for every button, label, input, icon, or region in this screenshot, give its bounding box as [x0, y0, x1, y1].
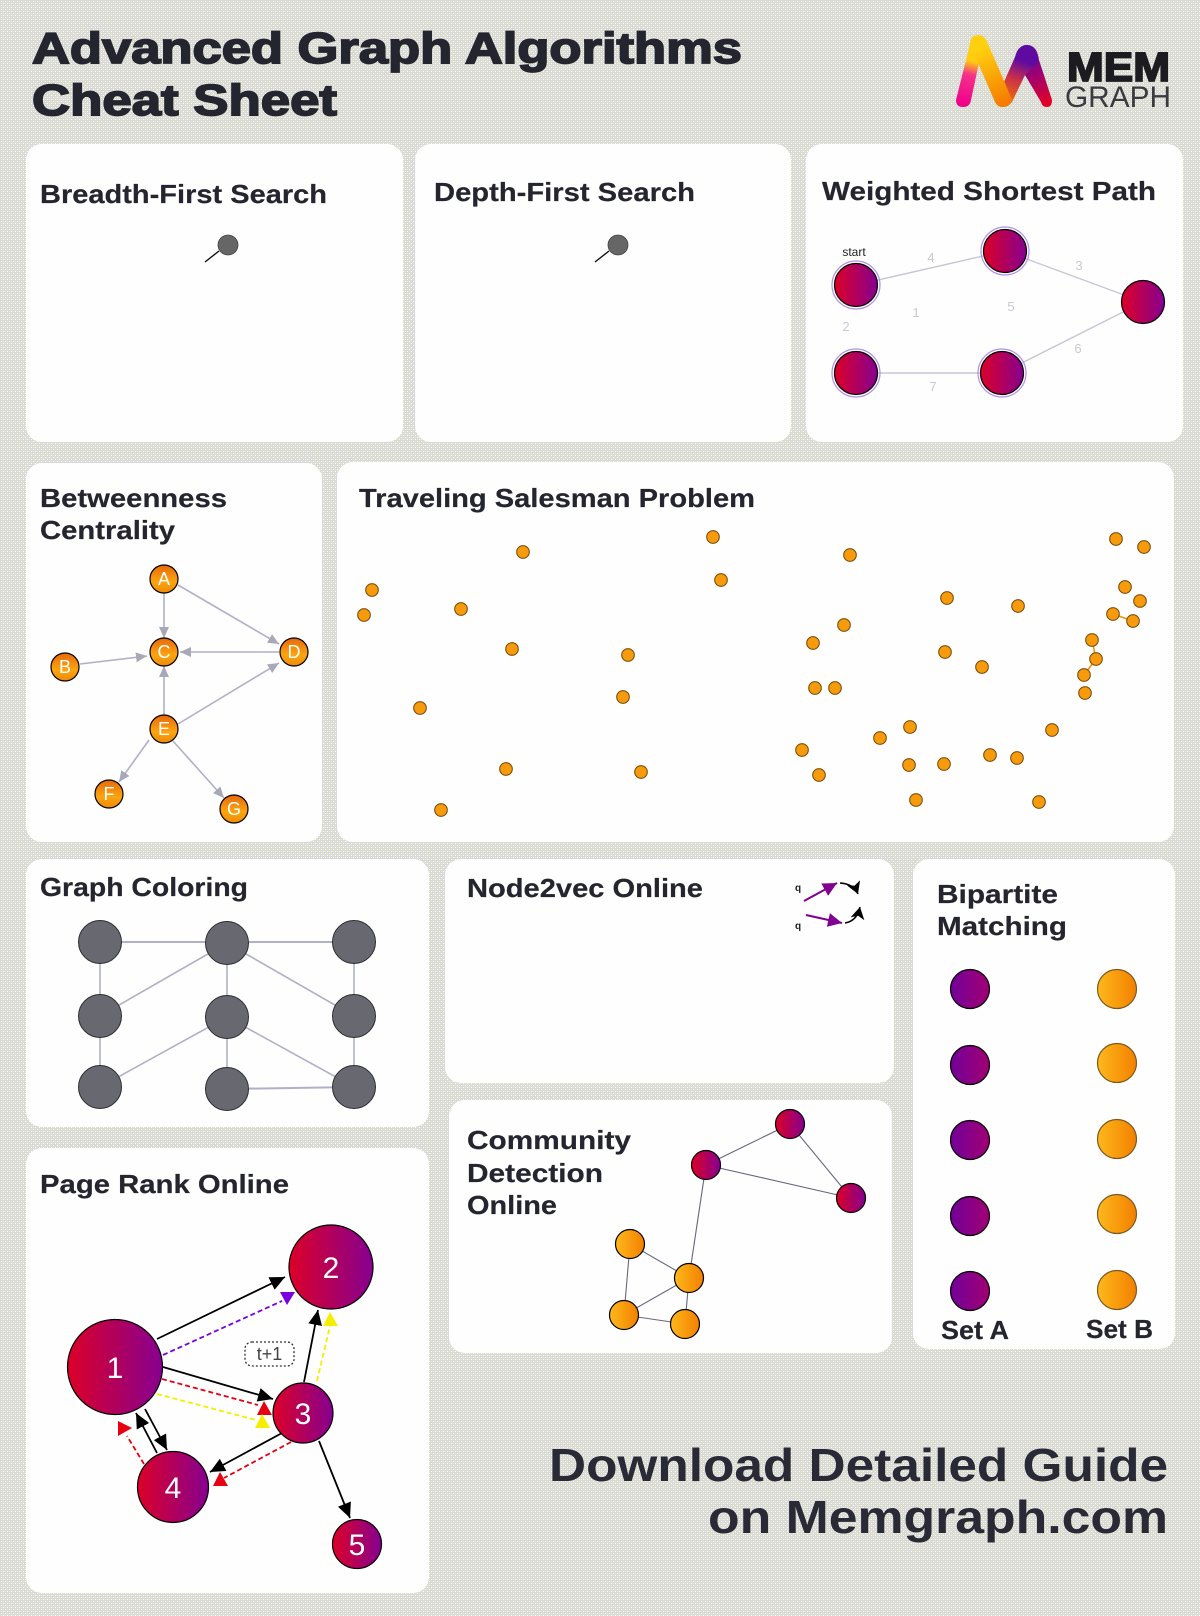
logo: Memgraph: GRAPH	[1065, 81, 1171, 114]
icon: p and q walk parameters: q	[795, 921, 801, 932]
directed graph: E	[158, 719, 170, 739]
panel: Bipartite Matching: Matching	[937, 911, 1067, 941]
directed graph: C	[158, 642, 170, 662]
set A nodes	[950, 970, 990, 1310]
panel: Bipartite Matching: Bipartite	[937, 879, 1058, 909]
weighted graph: 3	[1075, 258, 1083, 273]
panel: Depth-First Search: Depth-First Search	[434, 177, 695, 207]
title	[32, 24, 742, 125]
panel: Graph Coloring	[26, 859, 429, 1127]
panel: Weighted Shortest Path	[806, 144, 1183, 442]
directed graph	[51, 565, 308, 823]
panel: Traveling Salesman Problem	[337, 462, 1174, 842]
weighted graph	[832, 227, 1164, 397]
panel: Betweenness Centrality	[26, 463, 322, 842]
weighted graph: 1	[912, 305, 920, 320]
t+1 time step badge: t+1	[257, 1344, 282, 1364]
weighted graph: 7	[929, 379, 937, 394]
page rank graph: 5	[349, 1529, 365, 1562]
directed graph: B	[59, 657, 71, 677]
grid graph	[78, 920, 376, 1110]
panel: Community Detection Online: Community	[467, 1125, 632, 1155]
panel: Node2vec Online	[445, 859, 894, 1083]
start node with edge	[205, 235, 238, 262]
page rank graph: 4	[165, 1472, 181, 1505]
page rank graph: 2	[323, 1252, 339, 1285]
panel: Breadth-First Search	[26, 144, 403, 442]
page rank graph: 3	[295, 1398, 311, 1431]
panel: Bipartite Matching	[913, 859, 1175, 1349]
set B nodes	[1098, 970, 1136, 1310]
panel: Depth-First Search	[415, 144, 791, 442]
panel: Traveling Salesman Problem: Traveling Salesman Problem	[359, 483, 755, 513]
title: Cheat Sheet	[32, 76, 337, 125]
call to action: Download Detailed Guide	[549, 1439, 1168, 1491]
weighted graph: 5	[1007, 299, 1015, 314]
logo: Memgraph: MEM	[1067, 44, 1170, 90]
start node with edge	[595, 235, 628, 262]
panel: Bipartite Matching: Set B	[1086, 1314, 1153, 1344]
weighted graph: start	[842, 245, 866, 259]
solid arrows	[136, 1277, 350, 1518]
panel: Page Rank Online: Page Rank Online	[40, 1169, 289, 1199]
directed graph: D	[288, 642, 300, 662]
weighted graph: 2	[842, 319, 850, 334]
directed graph: F	[104, 784, 114, 804]
panel: Node2vec Online: Node2vec Online	[467, 873, 703, 903]
icon: p and q walk parameters	[795, 883, 860, 932]
weighted graph: 6	[1074, 341, 1082, 356]
page rank graph	[68, 1225, 382, 1568]
panel: Weighted Shortest Path: Weighted Shortest Path	[822, 176, 1156, 206]
dashed rank flows	[127, 1301, 330, 1478]
call to action	[549, 1439, 1168, 1543]
community graph	[610, 1110, 866, 1338]
panel: Bipartite Matching: Set A	[941, 1315, 1009, 1345]
weighted graph: 4	[927, 250, 935, 265]
panel: Page Rank Online	[26, 1148, 429, 1593]
panel: Breadth-First Search: Breadth-First Search	[40, 179, 327, 209]
city nodes	[358, 531, 1150, 816]
page rank graph: 1	[107, 1352, 123, 1385]
directed graph: A	[158, 569, 170, 589]
panel: Community Detection Online: Online	[467, 1190, 557, 1220]
call to action: on Memgraph.com	[708, 1491, 1168, 1543]
icon: p and q walk parameters: q	[795, 883, 801, 894]
panel: Community Detection Online	[449, 1100, 892, 1353]
panel: Graph Coloring: Graph Coloring	[40, 872, 248, 902]
panel: Community Detection Online: Detection	[467, 1158, 603, 1188]
panel: Betweenness Centrality: Centrality	[40, 515, 176, 545]
logo mark	[956, 35, 1052, 107]
logo: Memgraph	[956, 35, 1171, 114]
directed graph: G	[227, 799, 241, 819]
rank flow arrowheads	[118, 1292, 338, 1486]
t+1 time step badge	[245, 1342, 294, 1366]
panel: Betweenness Centrality: Betweenness	[40, 483, 227, 513]
title: Advanced Graph Algorithms	[32, 24, 742, 73]
